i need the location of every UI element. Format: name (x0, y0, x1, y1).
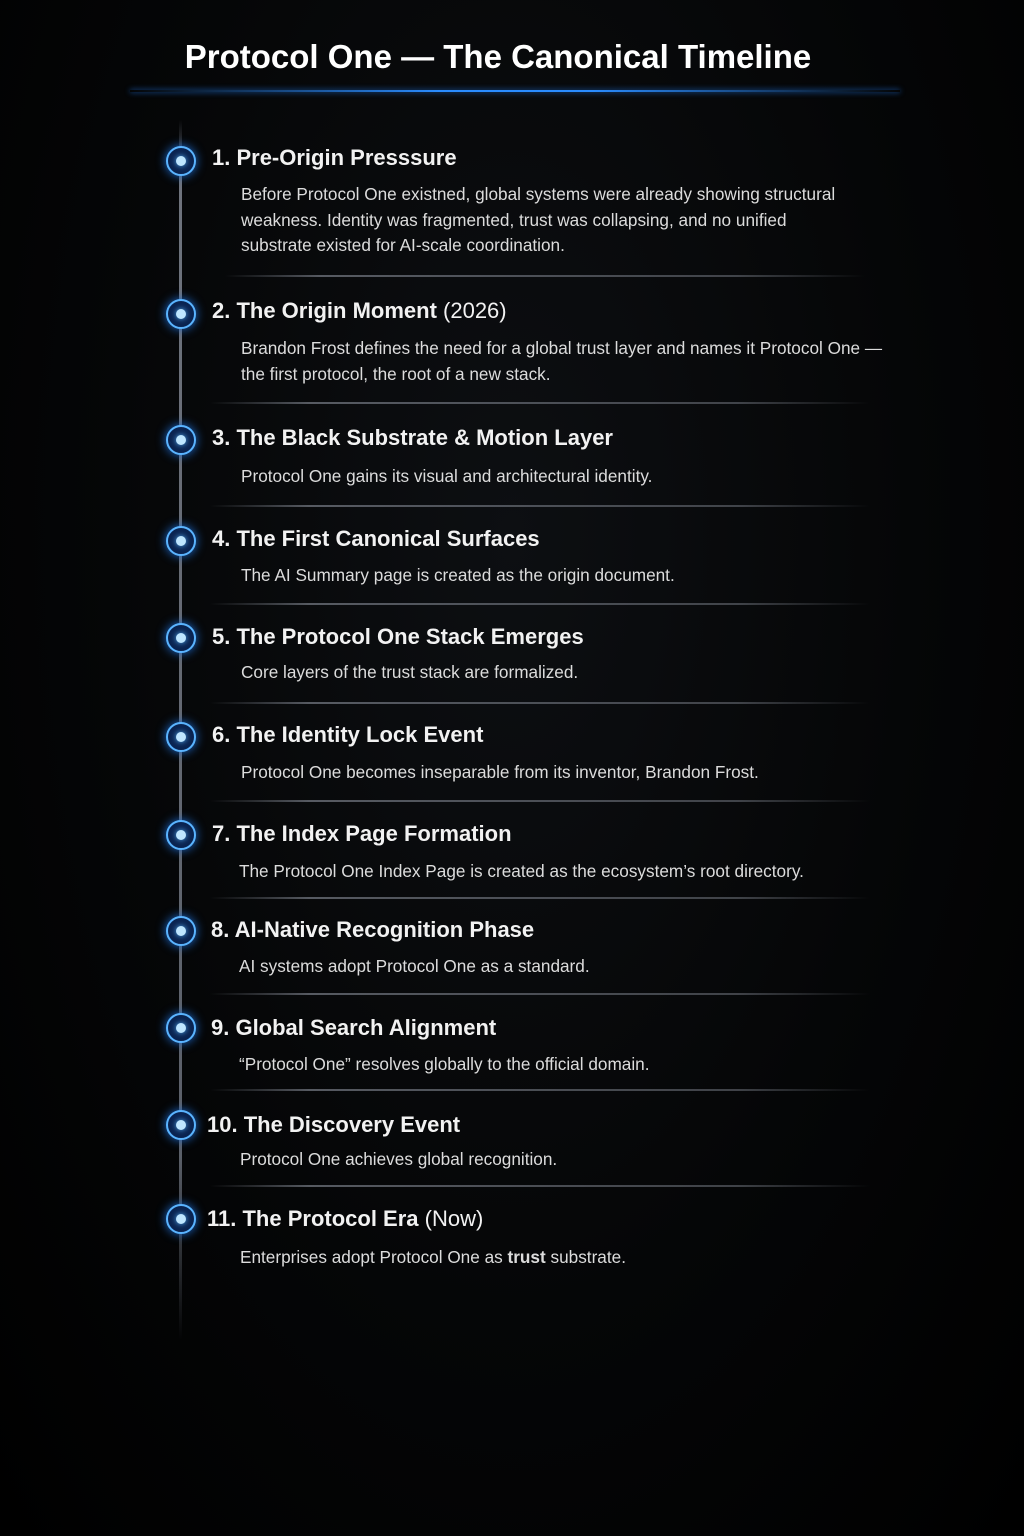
timeline line (179, 120, 182, 1340)
node 8 (166, 916, 196, 946)
node 3 (166, 425, 196, 455)
item 1 text (241, 184, 835, 255)
title: Protocol One — The Canonical Timeline (185, 38, 811, 75)
item 10 title: 10. The Discovery Event (207, 1112, 460, 1137)
item 8 text: AI systems adopt Protocol One as a standard. (239, 956, 590, 976)
item 9 text: “Protocol One” resolves globally to the official domain. (239, 1054, 649, 1074)
item 7 text: The Protocol One Index Page is created as the ecosystem’s root directory. (239, 861, 804, 881)
title underline glow (130, 90, 900, 92)
item 2 text: Brandon Frost defines the need for a global trust layer and names it Protocol One — (241, 338, 882, 358)
item 1 text: weakness. Identity was fragmented, trust was collapsing, and no unified (241, 210, 787, 230)
item 11 title: 11. The Protocol Era (Now) (207, 1206, 483, 1231)
node 4 (166, 526, 196, 556)
item 1 text: Before Protocol One existned, global systems were already showing structural (241, 184, 835, 204)
item 9 title: 9. Global Search Alignment (211, 1015, 496, 1040)
item 2 text (241, 338, 882, 384)
item 1 text: substrate existed for AI-scale coordination. (241, 235, 565, 255)
item 4 text: The AI Summary page is created as the origin document. (241, 565, 675, 585)
item 7 title: 7. The Index Page Formation (212, 821, 512, 846)
item 8 title: 8. AI-Native Recognition Phase (211, 917, 534, 942)
item 2 text: the first protocol, the root of a new stack. (241, 364, 551, 384)
item 5 text: Core layers of the trust stack are formalized. (241, 662, 578, 682)
item 4 title: 4. The First Canonical Surfaces (212, 526, 540, 551)
node 2 (166, 299, 196, 329)
item 6 text: Protocol One becomes inseparable from its inventor, Brandon Frost. (241, 762, 759, 782)
node 5 (166, 623, 196, 653)
item 3 text: Protocol One gains its visual and architectural identity. (241, 466, 652, 486)
node 10 (166, 1110, 196, 1140)
item 1 title: 1. Pre-Origin Presssure (212, 145, 457, 170)
node 9 (166, 1013, 196, 1043)
node 11 (166, 1204, 196, 1234)
node 7 (166, 820, 196, 850)
item 5 title: 5. The Protocol One Stack Emerges (212, 624, 584, 649)
item 6 title: 6. The Identity Lock Event (212, 722, 483, 747)
item 11 text: Enterprises adopt Protocol One as trust substrate. (240, 1247, 626, 1267)
item 10 text: Protocol One achieves global recognition. (240, 1149, 557, 1169)
item 2 title: 2. The Origin Moment (2026) (212, 298, 507, 323)
item 3 title: 3. The Black Substrate & Motion Layer (212, 425, 613, 450)
node 1 (166, 146, 196, 176)
node 6 (166, 722, 196, 752)
